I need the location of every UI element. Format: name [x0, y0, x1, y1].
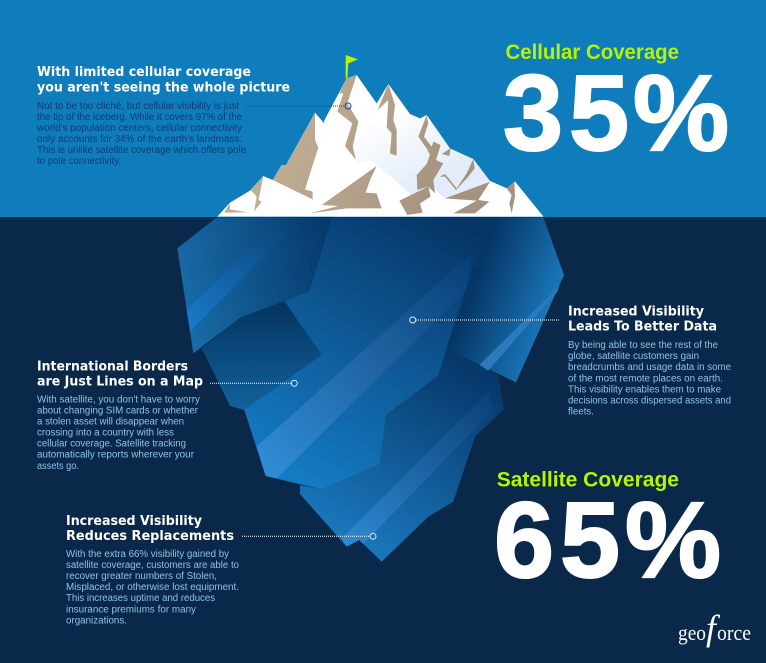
body: crossing into a country with less: [37, 428, 174, 439]
stat value: 65%: [494, 479, 721, 600]
front snow: [217, 113, 543, 217]
body: globe, satellite customers gain: [568, 351, 699, 362]
body: [66, 549, 239, 626]
iceberg tip: mountain: [217, 55, 543, 217]
body: organizations.: [66, 616, 127, 626]
body: about changing SIM cards or whether: [37, 406, 199, 417]
body: This visibility enables them to make: [568, 384, 721, 396]
heading: Increased Visibility: [568, 305, 705, 320]
lower iceberg section: [300, 349, 504, 562]
background: sky: [0, 0, 766, 217]
background: deep water: [0, 217, 766, 663]
logo: geoforce: [678, 608, 751, 648]
body: This increases uptime and reduces: [66, 593, 215, 604]
body: a stolen asset will disappear when: [37, 417, 184, 428]
body: recover greater numbers of Stolen,: [66, 571, 217, 582]
body: [37, 395, 200, 472]
body: [36, 101, 246, 167]
heading: With limited cellular coverage: [37, 65, 251, 80]
body: decisions across dispersed assets and: [568, 396, 731, 406]
heading: International Borders: [37, 360, 188, 375]
right section: [446, 217, 564, 382]
callout marker: better data: [410, 317, 560, 323]
heading: [66, 514, 234, 544]
body: of the most remote places on earth.: [568, 374, 723, 384]
stat value: 35%: [503, 52, 729, 173]
heading: Leads To Better Data: [568, 320, 717, 335]
logo: geoforce: f: [706, 608, 721, 648]
body: satellite coverage, customers are able to: [66, 560, 239, 571]
body: cellular coverage. Satellite tracking: [37, 439, 186, 450]
body: By being able to see the rest of the: [568, 340, 718, 351]
back peaks: [324, 75, 543, 217]
body: to pole connectivity.: [37, 156, 121, 167]
body: fleets.: [568, 406, 594, 418]
body: [568, 340, 731, 418]
text block: international borders: [37, 360, 203, 472]
callout marker: cellular: [247, 103, 351, 109]
callout marker: replacements: [242, 533, 376, 539]
body: breadcrumbs and usage data in some: [568, 362, 731, 373]
body: only accounts for 34% of the earth's landmass.: [37, 134, 242, 145]
iceberg underwater: [177, 217, 564, 562]
text block: limited cellular coverage: [36, 65, 290, 167]
body: Misplaced, or otherwise lost equipment.: [66, 582, 239, 593]
body: insurance premiums for many: [66, 604, 196, 616]
upper left section: [177, 217, 332, 353]
body: Not to be too cliché, but cellular visibility is just: [37, 101, 239, 112]
body: the tip of the iceberg. While it covers 97% of the: [37, 112, 242, 123]
logo: geoforce: orce: [717, 620, 751, 645]
text block: reduces replacements: [66, 514, 239, 626]
body: assets go.: [37, 461, 79, 472]
heading: [37, 65, 290, 96]
central iceberg section: [244, 217, 490, 489]
icon: summit flag: [346, 55, 358, 78]
body: world's population centers, cellular connectivity: [36, 123, 242, 134]
heading: [37, 360, 203, 390]
rock faces: [224, 75, 515, 215]
stat: satellite coverage: [494, 469, 721, 600]
body: automatically reports wherever your: [37, 450, 195, 461]
heading: Reduces Replacements: [66, 529, 234, 544]
left lower section: [202, 301, 322, 447]
heading: you aren't seeing the whole picture: [37, 81, 290, 96]
logo: geoforce: geo: [678, 620, 706, 645]
callout marker: borders: [210, 380, 297, 386]
stat: cellular coverage: [503, 41, 729, 173]
text block: better data: [568, 305, 731, 418]
stat label: Cellular Coverage: [506, 41, 679, 64]
body: This is unlike satellite coverage which offers pole: [37, 145, 246, 156]
stat label: Satellite Coverage: [497, 469, 679, 492]
body: With satellite, you don't have to worry: [37, 395, 200, 406]
body: With the extra 66% visibility gained by: [66, 549, 229, 560]
heading: Increased Visibility: [66, 514, 203, 529]
heading: are Just Lines on a Map: [37, 375, 203, 390]
heading: [568, 305, 717, 335]
